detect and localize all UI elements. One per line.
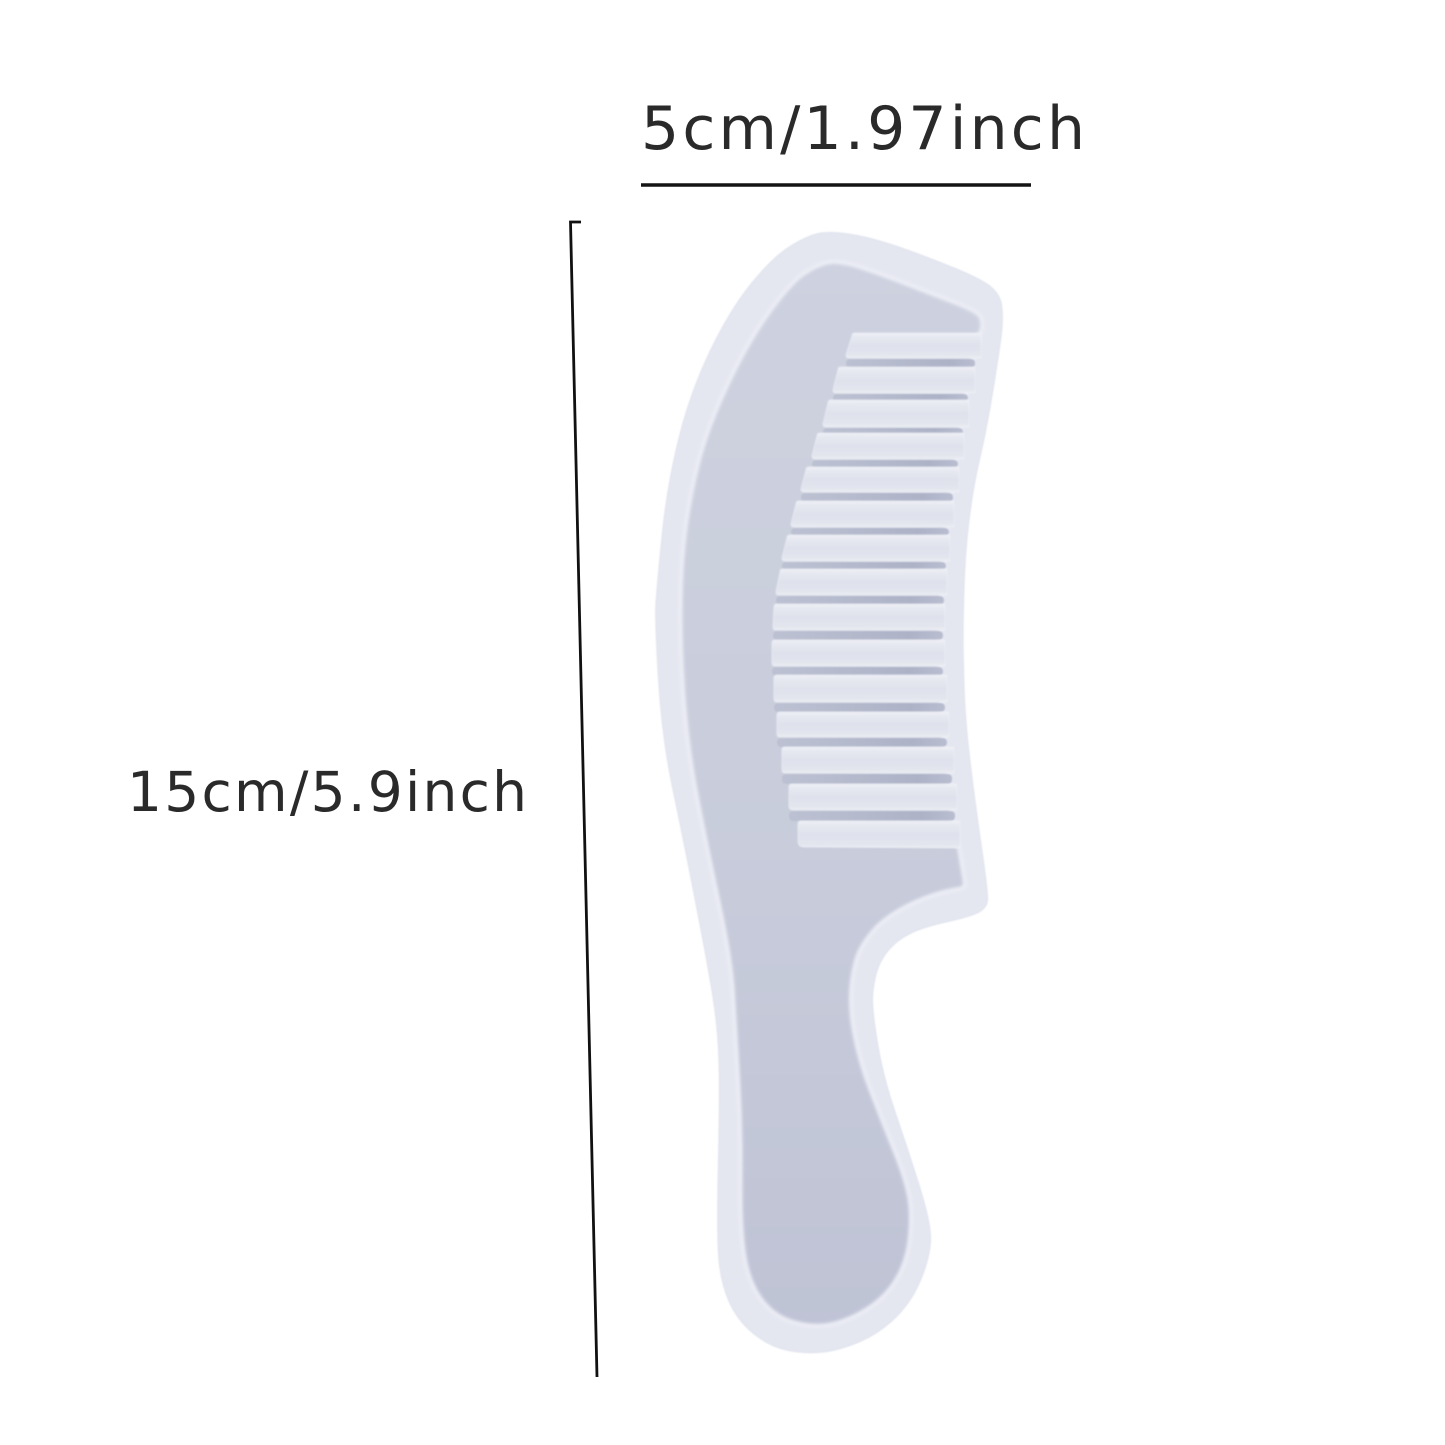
slots between teeth	[772, 359, 975, 821]
comb mold	[656, 232, 1002, 1353]
comb teeth	[772, 333, 981, 848]
width label: 5cm/1.97inch	[641, 94, 1085, 164]
rim highlight	[682, 264, 980, 1324]
mold inner cavity	[682, 264, 980, 1324]
height label: 15cm/5.9inch	[127, 760, 527, 824]
width dimension line	[641, 183, 1031, 187]
mold outer rim	[656, 232, 1002, 1353]
height dimension line	[570, 222, 597, 1377]
